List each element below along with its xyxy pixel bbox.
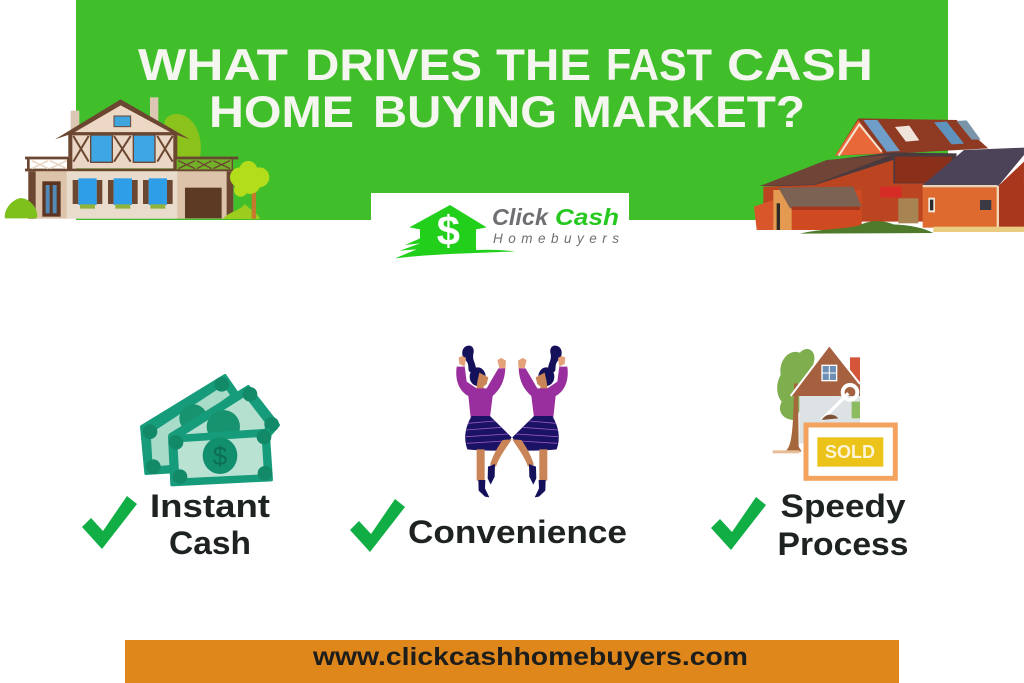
label: speedy process: Speedy	[780, 488, 906, 524]
logo wordmark: Click	[492, 204, 549, 230]
check mark: instant cash	[82, 496, 137, 549]
label: speedy process: Process	[778, 526, 908, 562]
title: MARKET?	[572, 88, 805, 137]
icon: logo house with dollar	[395, 205, 515, 258]
icon: barn right	[754, 118, 1024, 234]
footer bar	[125, 640, 899, 683]
green header banner	[76, 0, 948, 220]
logo wordmark	[492, 204, 619, 246]
figure left	[456, 346, 512, 497]
icon: sold house	[773, 345, 895, 478]
label: instant cash	[150, 488, 270, 561]
icon: sold house: SOLD	[825, 441, 875, 462]
title: THE	[496, 41, 591, 90]
icon: house left	[5, 97, 269, 219]
logo	[371, 193, 629, 260]
icon: money bills: $	[213, 441, 228, 471]
check mark: convenience	[350, 499, 405, 552]
logo wordmark: Homebuyers	[493, 231, 619, 246]
title: WHAT	[138, 41, 288, 90]
label: instant cash: Instant	[150, 488, 270, 524]
title: DRIVES	[305, 41, 482, 90]
icon: two dancing women	[456, 346, 568, 497]
label: speedy process	[778, 488, 908, 562]
icon: logo house with dollar: $	[437, 207, 460, 254]
figure right	[512, 346, 568, 497]
title: FAST	[606, 41, 712, 90]
label: instant cash: Cash	[169, 525, 251, 561]
check mark: speedy process	[711, 497, 766, 550]
title: CASH	[727, 41, 873, 90]
logo wordmark: Cash	[555, 204, 619, 230]
title	[138, 41, 873, 137]
website url: www.clickcashhomebuyers.com	[312, 643, 748, 671]
title: BUYING	[373, 88, 557, 137]
title: HOME	[209, 88, 354, 137]
icon: money bills	[142, 376, 279, 485]
label: convenience: Convenience	[408, 514, 627, 550]
